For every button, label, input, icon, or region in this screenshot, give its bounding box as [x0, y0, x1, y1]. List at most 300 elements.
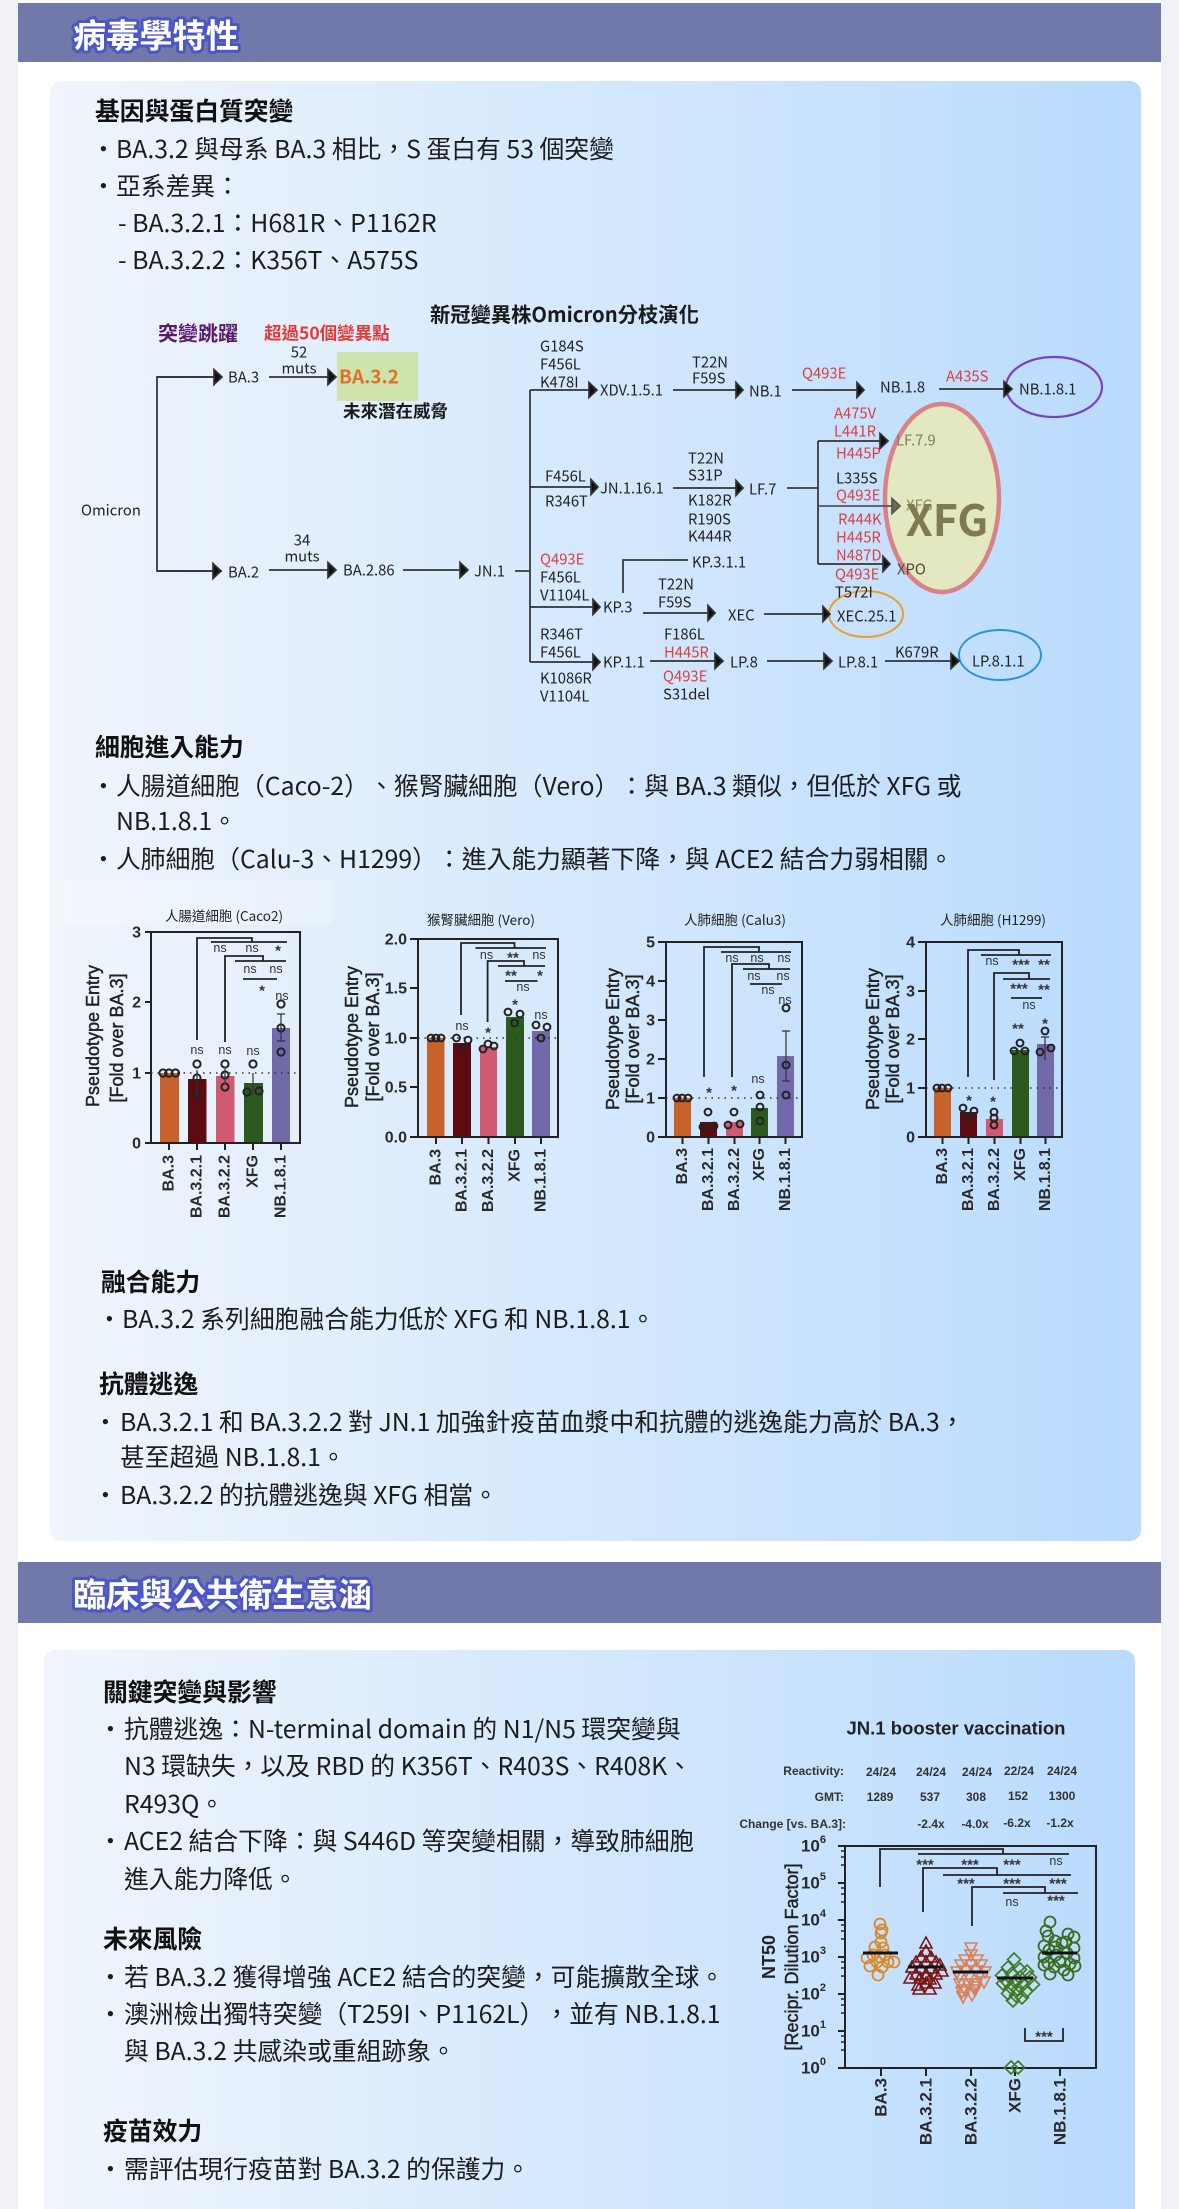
section band: clinical and public health — [18, 1562, 1161, 1623]
x axis labels: BA.3 — [160, 1155, 178, 1191]
mutation labels: Q493E — [835, 564, 879, 584]
text block: future risk: 未來風險 — [103, 1920, 202, 1956]
x axis labels: NB.1.8.1 — [272, 1155, 290, 1218]
x axis labels: BA.3.2.1 — [960, 1148, 977, 1211]
text block: key mutations: 進入能力降低。 — [124, 1860, 298, 1896]
x axis labels: BA.3.2.2 — [216, 1155, 234, 1218]
section band: virology — [18, 3, 1161, 62]
lineage labels: 52 — [291, 342, 307, 362]
text block: fusion: BA.3.2 系列細胞融合能力低於 XFG 和 NB.1.8.1。 — [122, 1300, 655, 1336]
significance brackets: ns — [480, 948, 493, 962]
y axis ticks: 10 — [801, 1874, 820, 1892]
mutation labels: F59S — [692, 368, 726, 388]
x axis labels: BA.3.2.2 — [986, 1148, 1003, 1211]
y axis ticks: 2 — [132, 994, 141, 1012]
significance brackets: * — [731, 1082, 737, 1100]
significance brackets: ** — [507, 950, 519, 966]
bar chart: Caco2 — [83, 905, 300, 1218]
mutation labels: R190S — [688, 508, 731, 530]
mutation labels: F186L — [664, 624, 705, 644]
mutation labels: F59S — [658, 592, 692, 612]
text block: future risk: • — [98, 1995, 123, 2031]
log minor ticks — [841, 1851, 845, 2050]
bars — [934, 1044, 1054, 1137]
lineage labels — [81, 342, 1076, 672]
significance brackets: * — [537, 968, 543, 984]
text block: cell entry: • — [91, 767, 116, 803]
text block: cell entry: NB.1.8.1。 — [116, 802, 237, 838]
y axis ticks: 0 — [820, 2056, 826, 2068]
mutation labels: H445R — [836, 526, 881, 548]
summary table: 308 — [966, 1790, 986, 1804]
data points — [428, 1009, 550, 1052]
data points — [934, 1028, 1054, 1128]
y axis ticks: 10 — [801, 2058, 820, 2078]
y axis label — [603, 968, 643, 1110]
text block: key mutations: 抗體逃逸：N-terminal domain 的 N1/N5 環突變與 — [124, 1710, 681, 1746]
chart: JN.1 booster neutralization — [739, 1718, 1096, 2145]
lineage labels: muts — [281, 358, 317, 378]
summary table: -6.2x — [1003, 1816, 1031, 1830]
lineage labels: NB.1.8.1 — [1019, 378, 1076, 400]
x axis labels: XFG — [244, 1155, 262, 1188]
significance brackets: ns — [218, 1043, 232, 1057]
callout: future threat: 未來潛在威脅 — [343, 398, 448, 424]
y axis ticks: 4 — [820, 1908, 827, 1920]
significance brackets — [190, 938, 289, 1058]
y axis label: [Fold over BA.3] — [107, 973, 127, 1103]
significance brackets: ns — [776, 969, 790, 983]
y axis ticks: 4 — [646, 974, 655, 990]
panel: virology details — [50, 81, 1141, 1541]
significance brackets: ns — [243, 962, 257, 976]
mutation labels: Q493E — [802, 362, 846, 384]
significance brackets: ** — [1038, 982, 1050, 998]
lineage labels: BA.2.86 — [343, 560, 395, 580]
x axis labels — [934, 1148, 1054, 1211]
text block: future risk: • — [98, 1958, 123, 1994]
text block: key mutations: ACE2 結合下降：與 S446D 等突變相關，導致肺細胞 — [124, 1822, 694, 1858]
summary table: 24/24 — [916, 1765, 946, 1779]
mutation labels: S31P — [688, 464, 723, 486]
y axis label: NT50 — [759, 1935, 779, 1979]
chart title: 人肺細胞 (Calu3) — [684, 909, 786, 929]
mutation labels: T22N — [692, 352, 728, 372]
summary table: 152 — [1008, 1789, 1028, 1803]
text block: antibody escape: 抗體逃逸 — [99, 1365, 198, 1401]
lineage labels: 34 — [294, 530, 310, 550]
x axis labels: BA.3.2.2 — [480, 1149, 497, 1212]
significance brackets — [966, 950, 1051, 1110]
x axis labels: XFG — [1006, 2078, 1024, 2113]
summary table: Reactivity: — [783, 1764, 844, 1778]
text block: antibody escape: BA.3.2.1 和 BA.3.2.2 對 JN.1 加強針疫苗血漿中和抗體的逃逸能力高於 BA.3， — [120, 1403, 965, 1439]
y axis ticks: 10 — [801, 1984, 820, 2004]
text block: mutations: - BA.3.2.2：K356T、A575S — [118, 241, 418, 277]
y axis label — [759, 1863, 802, 2051]
y axis ticks: 1.0 — [385, 1030, 407, 1048]
y axis ticks — [385, 932, 407, 1146]
summary table: 1300 — [1049, 1789, 1076, 1803]
text block: future risk: 若 BA.3.2 獲得增強 ACE2 結合的突變，可能擴散全球。 — [124, 1958, 724, 1994]
significance brackets: ** — [505, 968, 517, 984]
x axis labels: NB.1.8.1 — [1037, 1148, 1054, 1211]
diagram title: 新冠變異株Omicron分枝演化 — [430, 298, 699, 328]
mutation labels: K182R — [688, 490, 732, 510]
significance brackets: *** — [1049, 1876, 1067, 1892]
section title: 臨床與公共衛生意涵 — [73, 1568, 372, 1616]
bars — [427, 1017, 550, 1137]
y axis ticks: 0 — [132, 1136, 141, 1152]
mutation labels: T22N — [688, 448, 724, 468]
mutation labels: A475V — [834, 402, 877, 424]
significance brackets: ns — [213, 941, 227, 955]
significance brackets — [455, 943, 548, 1042]
x axis labels — [428, 1149, 550, 1212]
scatter: XFG diamonds — [996, 1953, 1040, 2074]
text block: cell entry — [91, 728, 961, 876]
lineage labels: KP.1.1 — [603, 652, 645, 672]
significance brackets: *** — [916, 1856, 934, 1874]
y axis ticks — [801, 1834, 827, 2078]
lineage labels: BA.2 — [228, 562, 259, 582]
y axis label: [Fold over BA.3] — [883, 974, 903, 1104]
text block: future risk — [98, 1920, 724, 2068]
mutation labels: F456L — [545, 466, 586, 486]
significance brackets: ** — [1038, 956, 1050, 974]
mutation labels: K679R — [895, 642, 939, 662]
y axis label: [Recipr. Dilution Factor] — [782, 1863, 802, 2051]
significance brackets: ns — [777, 951, 791, 965]
lineage labels: muts — [284, 546, 320, 566]
mutation labels: F456L — [540, 642, 581, 662]
lineage labels: LF.7.9 — [896, 430, 936, 450]
lineage labels: XPO — [897, 558, 926, 580]
lineage labels: NB.1 — [749, 380, 782, 402]
y axis ticks — [132, 924, 141, 1152]
y axis label — [342, 966, 383, 1108]
diagram: Omicron lineage evolution — [81, 298, 1102, 706]
summary table: 22/24 — [1004, 1764, 1034, 1778]
significance brackets: ns — [455, 1019, 469, 1033]
significance brackets: * — [259, 982, 265, 1000]
text block: vaccine efficacy — [98, 2112, 530, 2186]
callout: over 50 mutations: 超過50個變異點 — [264, 320, 390, 346]
scatter: NB.1.8.1 circles — [1038, 1916, 1080, 1980]
mutation labels: K444R — [688, 526, 732, 546]
significance brackets: ns — [778, 993, 792, 1007]
significance brackets: *** — [1010, 980, 1028, 998]
mutation labels: R444K — [838, 508, 882, 530]
summary table: -1.2x — [1046, 1816, 1074, 1830]
chart title: 人肺細胞 (H1299) — [940, 909, 1046, 929]
significance brackets: ns — [246, 1044, 260, 1058]
significance brackets: * — [990, 1094, 996, 1110]
scatter: BA.3 circles — [862, 1918, 900, 1980]
summary table: 1289 — [867, 1790, 894, 1804]
significance brackets: *** — [957, 1876, 975, 1892]
text block: antibody escape — [93, 1365, 965, 1512]
mutation labels: Q493E — [663, 666, 707, 686]
mutation labels: R346T — [545, 490, 588, 512]
significance brackets: *** — [1003, 1856, 1021, 1874]
mutation labels: V1104L — [540, 584, 589, 606]
x axis labels: NB.1.8.1 — [1050, 2078, 1070, 2145]
bar chart: Calu3 — [603, 909, 802, 1211]
y axis ticks: 1 — [820, 2019, 826, 2031]
significance brackets: * — [275, 942, 281, 960]
y axis ticks: 3 — [906, 984, 915, 1000]
text block: vaccine efficacy: 疫苗效力 — [103, 2112, 202, 2148]
text block: antibody escape: • — [93, 1476, 118, 1512]
significance brackets: ns — [750, 951, 764, 965]
x axis labels: NB.1.8.1 — [532, 1149, 550, 1212]
text block: cell entry: 人腸道細胞（Caco-2）、猴腎臟細胞（Vero）：與 BA.3 類似，但低於 XFG 或 — [116, 767, 961, 803]
y axis ticks: 2.0 — [385, 932, 407, 948]
lineage labels: JN.1.16.1 — [600, 478, 664, 498]
panel: clinical implications — [44, 1650, 1135, 2209]
text block: mutations: - BA.3.2.1：H681R、P1162R — [118, 204, 437, 240]
y axis ticks: 1 — [132, 1066, 141, 1082]
significance brackets: ns — [751, 1072, 765, 1086]
significance brackets: * — [1042, 1016, 1048, 1032]
x axis labels: BA.3.2.2 — [962, 2078, 980, 2145]
text block: mutations: BA.3.2 與母系 BA.3 相比，S 蛋白有 53 個突變 — [116, 130, 614, 166]
lineage labels: KP.3.1.1 — [692, 552, 746, 572]
significance brackets: * — [706, 1084, 712, 1102]
x axis labels: BA.3 — [674, 1148, 691, 1184]
mutation labels: K1086R — [540, 668, 592, 688]
x axis labels: XFG — [751, 1148, 768, 1181]
text block: key mutations: 關鍵突變與影響 — [103, 1673, 277, 1709]
data points — [674, 1005, 790, 1130]
text block: cell entry: • — [91, 840, 116, 876]
significance brackets: ns — [269, 962, 283, 976]
y axis ticks: 3 — [820, 1945, 826, 1957]
summary table: 24/24 — [1047, 1764, 1077, 1778]
significance brackets: ns — [1022, 998, 1036, 1012]
significance brackets: ns — [534, 1008, 548, 1022]
y axis ticks: 0 — [906, 1130, 915, 1146]
data points — [159, 1000, 285, 1098]
significance brackets: ns — [725, 951, 739, 965]
y axis ticks: 1.5 — [385, 980, 407, 998]
significance brackets: * — [485, 1024, 491, 1042]
y axis label: [Fold over BA.3] — [363, 972, 383, 1102]
x axis labels — [872, 2078, 1070, 2145]
axes frame and ticks — [838, 1846, 1096, 2076]
y axis ticks: 2 — [820, 1982, 826, 1994]
text block: key mutations: • — [98, 1710, 123, 1746]
bars — [160, 1028, 290, 1143]
text block: cell entry: 人肺細胞（Calu-3、H1299）：進入能力顯著下降，與 ACE2 結合力弱相關。 — [116, 840, 953, 876]
y axis ticks: 3 — [132, 924, 141, 942]
mutation labels: L441R — [834, 420, 876, 442]
y axis ticks: 3 — [646, 1012, 655, 1030]
ellipse: XFG highlight — [885, 404, 999, 592]
summary table: -4.0x — [961, 1817, 989, 1831]
axes frame and ticks — [410, 939, 558, 1144]
y axis ticks: 1 — [906, 1080, 915, 1098]
x axis labels: BA.3 — [428, 1149, 444, 1185]
lineage labels: LP.8.1 — [838, 652, 878, 672]
lineage labels: LF.7 — [749, 478, 776, 500]
significance brackets: ns — [532, 948, 546, 962]
pale backing behind first chart title — [62, 880, 332, 925]
x axis labels: NB.1.8.1 — [777, 1148, 794, 1211]
summary table: 24/24 — [866, 1765, 896, 1779]
mutation labels: G184S — [540, 336, 584, 356]
y axis label — [83, 965, 127, 1107]
text block: future risk: 與 BA.3.2 共感染或重組跡象。 — [124, 2032, 456, 2068]
chart title: 猴腎臟細胞 (Vero) — [427, 909, 535, 929]
x axis labels: BA.3.2.2 — [726, 1148, 743, 1211]
lineage labels: JN.1 — [474, 560, 505, 582]
bars — [674, 1056, 794, 1137]
lineage labels: XEC — [728, 604, 755, 626]
highlighted label BA.3.2: BA.3.2 — [339, 362, 399, 390]
significance brackets: ns — [1005, 1895, 1019, 1909]
y axis label: Pseudotype Entry — [603, 968, 623, 1110]
significance brackets — [880, 1849, 1078, 2046]
chart title: JN.1 booster vaccination — [847, 1718, 1065, 1738]
significance brackets: * — [512, 996, 518, 1014]
significance brackets: *** — [1003, 1876, 1021, 1892]
x axis labels: XFG — [1012, 1148, 1029, 1181]
mutation labels: F456L — [540, 354, 581, 374]
mutation labels: T22N — [658, 574, 694, 594]
mutation labels: K478I — [540, 372, 579, 392]
mutation labels: F456L — [540, 566, 581, 588]
ellipse: LP.8.1.1 — [959, 630, 1041, 680]
lineage labels: LP.8 — [730, 652, 758, 672]
mutation labels: R346T — [540, 624, 583, 644]
y axis ticks: 5 — [820, 1871, 826, 1883]
y axis ticks: 4 — [906, 934, 915, 952]
text block: vaccine efficacy: 需評估現行疫苗對 BA.3.2 的保護力。 — [124, 2150, 530, 2186]
y axis ticks — [906, 934, 915, 1146]
mutation labels: H445R — [664, 642, 709, 662]
summary table — [739, 1764, 1077, 1831]
y axis label: Pseudotype Entry — [863, 968, 883, 1110]
x axis labels: BA.3.2.1 — [454, 1149, 470, 1212]
significance brackets: ** — [1012, 1020, 1024, 1038]
significance brackets: ns — [516, 980, 530, 994]
lineage labels: XEC.25.1 — [837, 606, 896, 626]
significance brackets: ns — [761, 983, 775, 997]
lineage labels: LP.8.1.1 — [972, 650, 1025, 672]
significance brackets: ns — [190, 1043, 204, 1057]
lineage labels: NB.1.8 — [880, 376, 925, 398]
text block: mutations — [91, 92, 614, 277]
y axis label: [Fold over BA.3] — [623, 974, 643, 1104]
highlight box: BA.3.2 — [337, 352, 418, 401]
x axis labels — [160, 1155, 290, 1218]
significance brackets — [704, 947, 792, 1102]
y axis ticks: 2 — [646, 1052, 655, 1068]
text block: key mutations — [98, 1673, 694, 1896]
scatter: BA.3.2.2 triangles — [951, 1943, 991, 2003]
text block: mutations: • — [91, 167, 116, 203]
text block: key mutations: R493Q。 — [124, 1785, 224, 1821]
callout: mutation jump: 突變跳躍 — [158, 318, 238, 346]
significance brackets: *** — [961, 1856, 979, 1874]
significance brackets: ns — [275, 989, 289, 1003]
y axis ticks: 2 — [906, 1032, 915, 1048]
text block: cell entry: 細胞進入能力 — [95, 728, 244, 764]
y axis ticks: 10 — [801, 2022, 820, 2040]
lineage labels: KP.3 — [603, 596, 632, 618]
axes frame and ticks — [918, 942, 1062, 1144]
text block: vaccine efficacy: • — [98, 2150, 123, 2186]
scatter: BA.3.2.1 triangles — [904, 1937, 948, 1994]
bar chart: Vero — [342, 909, 558, 1212]
x axis labels: XFG — [506, 1149, 524, 1182]
text block: antibody escape: BA.3.2.2 的抗體逃逸與 XFG 相當。 — [120, 1476, 498, 1512]
y axis label — [863, 968, 903, 1110]
text block: mutations: 亞系差異： — [116, 167, 240, 203]
mean lines — [863, 1953, 1077, 1978]
lineage labels: Omicron — [81, 500, 141, 520]
y axis ticks: 6 — [820, 1834, 826, 1846]
lineage labels: XDV.1.5.1 — [600, 380, 663, 400]
significance brackets: *** — [1047, 1892, 1065, 1910]
significance brackets: ns — [245, 941, 259, 955]
x axis labels: BA.3.2.1 — [188, 1155, 206, 1218]
ellipse: NB.1.8.1 — [1006, 357, 1102, 417]
mutation labels: A435S — [946, 366, 989, 386]
y axis ticks: 10 — [801, 1836, 820, 1856]
summary table: Change [vs. BA.3]: — [739, 1817, 846, 1831]
x axis labels: BA.3.2.1 — [916, 2078, 936, 2145]
mutation labels: Q493E — [836, 484, 880, 506]
text block: future risk: 澳洲檢出獨特突變（T259I、P1162L），並有 NB.1.8.1 — [124, 1995, 721, 2031]
summary table: 24/24 — [962, 1765, 992, 1779]
significance brackets: ns — [1049, 1854, 1063, 1868]
text block: key mutations: N3 環缺失，以及 RBD 的 K356T、R403S、R408K、 — [124, 1747, 692, 1783]
arrows: lineage branches — [157, 370, 1012, 670]
y axis label: Pseudotype Entry — [83, 965, 103, 1107]
mutation labels: S31del — [663, 684, 710, 704]
lineage labels: XFG — [906, 494, 933, 516]
ellipse: XEC.25.1 — [829, 591, 903, 637]
x axis labels: BA.3 — [934, 1148, 951, 1184]
axes frame and ticks — [658, 942, 802, 1144]
axes frame and ticks — [145, 932, 300, 1150]
mutation labels: T572I — [835, 582, 873, 602]
text block: key mutations: • — [98, 1822, 123, 1858]
mutation labels: L335S — [836, 468, 878, 488]
x axis labels: BA.3.2.1 — [700, 1148, 717, 1211]
text block: fusion: • — [97, 1300, 122, 1336]
bar chart: H1299 — [863, 909, 1062, 1211]
lineage labels: BA.3 — [228, 366, 259, 388]
y axis ticks: 10 — [801, 1948, 820, 1966]
y axis ticks: 10 — [801, 1910, 820, 1930]
y axis ticks: 1 — [646, 1090, 655, 1108]
tree root connectors — [157, 377, 818, 662]
summary table: -2.4x — [917, 1817, 945, 1831]
mutation labels — [540, 336, 989, 706]
summary table: 537 — [920, 1790, 940, 1804]
text block: mutations: 基因與蛋白質突變 — [95, 92, 294, 128]
text block: fusion — [97, 1263, 655, 1336]
text block: antibody escape: • — [93, 1403, 118, 1439]
mutation labels: Q493E — [540, 548, 584, 570]
significance brackets: *** — [1012, 956, 1030, 974]
significance brackets: * — [966, 1092, 972, 1110]
y axis label: Pseudotype Entry — [342, 966, 362, 1108]
